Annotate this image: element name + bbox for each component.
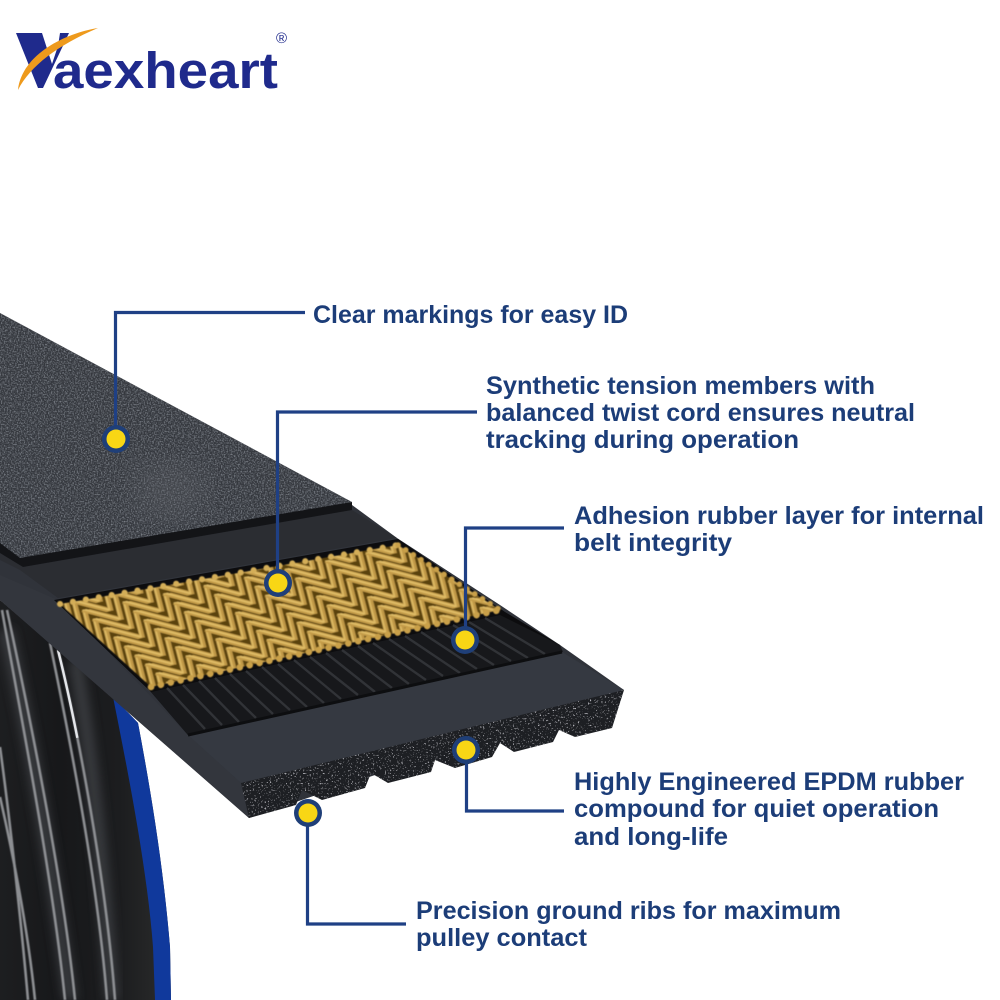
adhesion rubber ribbed layer bbox=[151, 615, 563, 735]
label bbox=[574, 768, 964, 851]
cord fill bbox=[60, 545, 500, 687]
callout: EPDM rubber bbox=[452, 736, 964, 851]
label: and long-life bbox=[574, 823, 728, 851]
rib end face bbox=[241, 690, 624, 818]
pulley bbox=[0, 600, 171, 1000]
pulley bright highlight bbox=[58, 650, 115, 1000]
label: belt integrity bbox=[574, 529, 732, 557]
label: Synthetic tension members with bbox=[486, 372, 875, 400]
marker dot bbox=[452, 736, 480, 764]
ribbed layer fill bbox=[151, 615, 563, 735]
pulley grey groove highlights bbox=[0, 610, 115, 1000]
label: tracking during operation bbox=[486, 426, 799, 454]
leader line bbox=[466, 528, 564, 640]
label: Adhesion rubber layer for internal bbox=[574, 502, 984, 530]
marker dot bbox=[294, 799, 322, 827]
label bbox=[574, 502, 984, 557]
label: compound for quiet operation bbox=[574, 795, 939, 823]
callout: tension members bbox=[264, 372, 915, 597]
rim of belt edge bbox=[0, 575, 249, 818]
top cover sheen bbox=[132, 462, 208, 518]
marker dot bbox=[451, 626, 479, 654]
leader line bbox=[278, 412, 477, 582]
pulley dark body bbox=[0, 600, 171, 1000]
top cover layer edge bbox=[0, 502, 352, 567]
logo letter V bbox=[16, 33, 69, 88]
second rubber layer bbox=[0, 510, 397, 598]
cord tufted lower edge bbox=[151, 610, 500, 687]
label bbox=[486, 372, 915, 454]
leader line bbox=[466, 750, 564, 811]
callout: clear markings bbox=[102, 301, 628, 453]
label: Clear markings for easy ID bbox=[313, 301, 628, 329]
marker dot bbox=[264, 569, 292, 597]
callout: precision ribs bbox=[294, 799, 841, 952]
logo orange swoosh bbox=[18, 28, 98, 90]
label: balanced twist cord ensures neutral bbox=[486, 399, 915, 427]
marker dot bbox=[102, 425, 130, 453]
pulley soft sheen bbox=[6, 630, 112, 1000]
leader line bbox=[116, 312, 305, 438]
label bbox=[416, 897, 841, 952]
logo: Vaexheart bbox=[16, 28, 287, 99]
belt cross-section bbox=[0, 313, 624, 818]
label: Precision ground ribs for maximum bbox=[416, 897, 841, 925]
callout: adhesion rubber bbox=[451, 502, 984, 654]
pulley blue rim bbox=[113, 697, 171, 1000]
label: pulley contact bbox=[416, 924, 588, 952]
cord tufted right edge bbox=[398, 545, 500, 610]
belt base silhouette bbox=[0, 505, 624, 818]
cord tufted upper edge bbox=[60, 545, 398, 604]
registered mark: ® bbox=[276, 30, 287, 47]
base layer top surface bbox=[188, 652, 624, 783]
leader line bbox=[308, 813, 406, 924]
tension cord weave bbox=[60, 545, 500, 687]
base layer groove shadow bbox=[188, 652, 562, 735]
rib lines bbox=[167, 618, 545, 729]
cord bed shadow bbox=[54, 539, 560, 735]
top cover layer surface bbox=[0, 313, 352, 558]
logo wordmark: aexheart bbox=[53, 42, 278, 99]
label: Highly Engineered EPDM rubber bbox=[574, 768, 964, 796]
